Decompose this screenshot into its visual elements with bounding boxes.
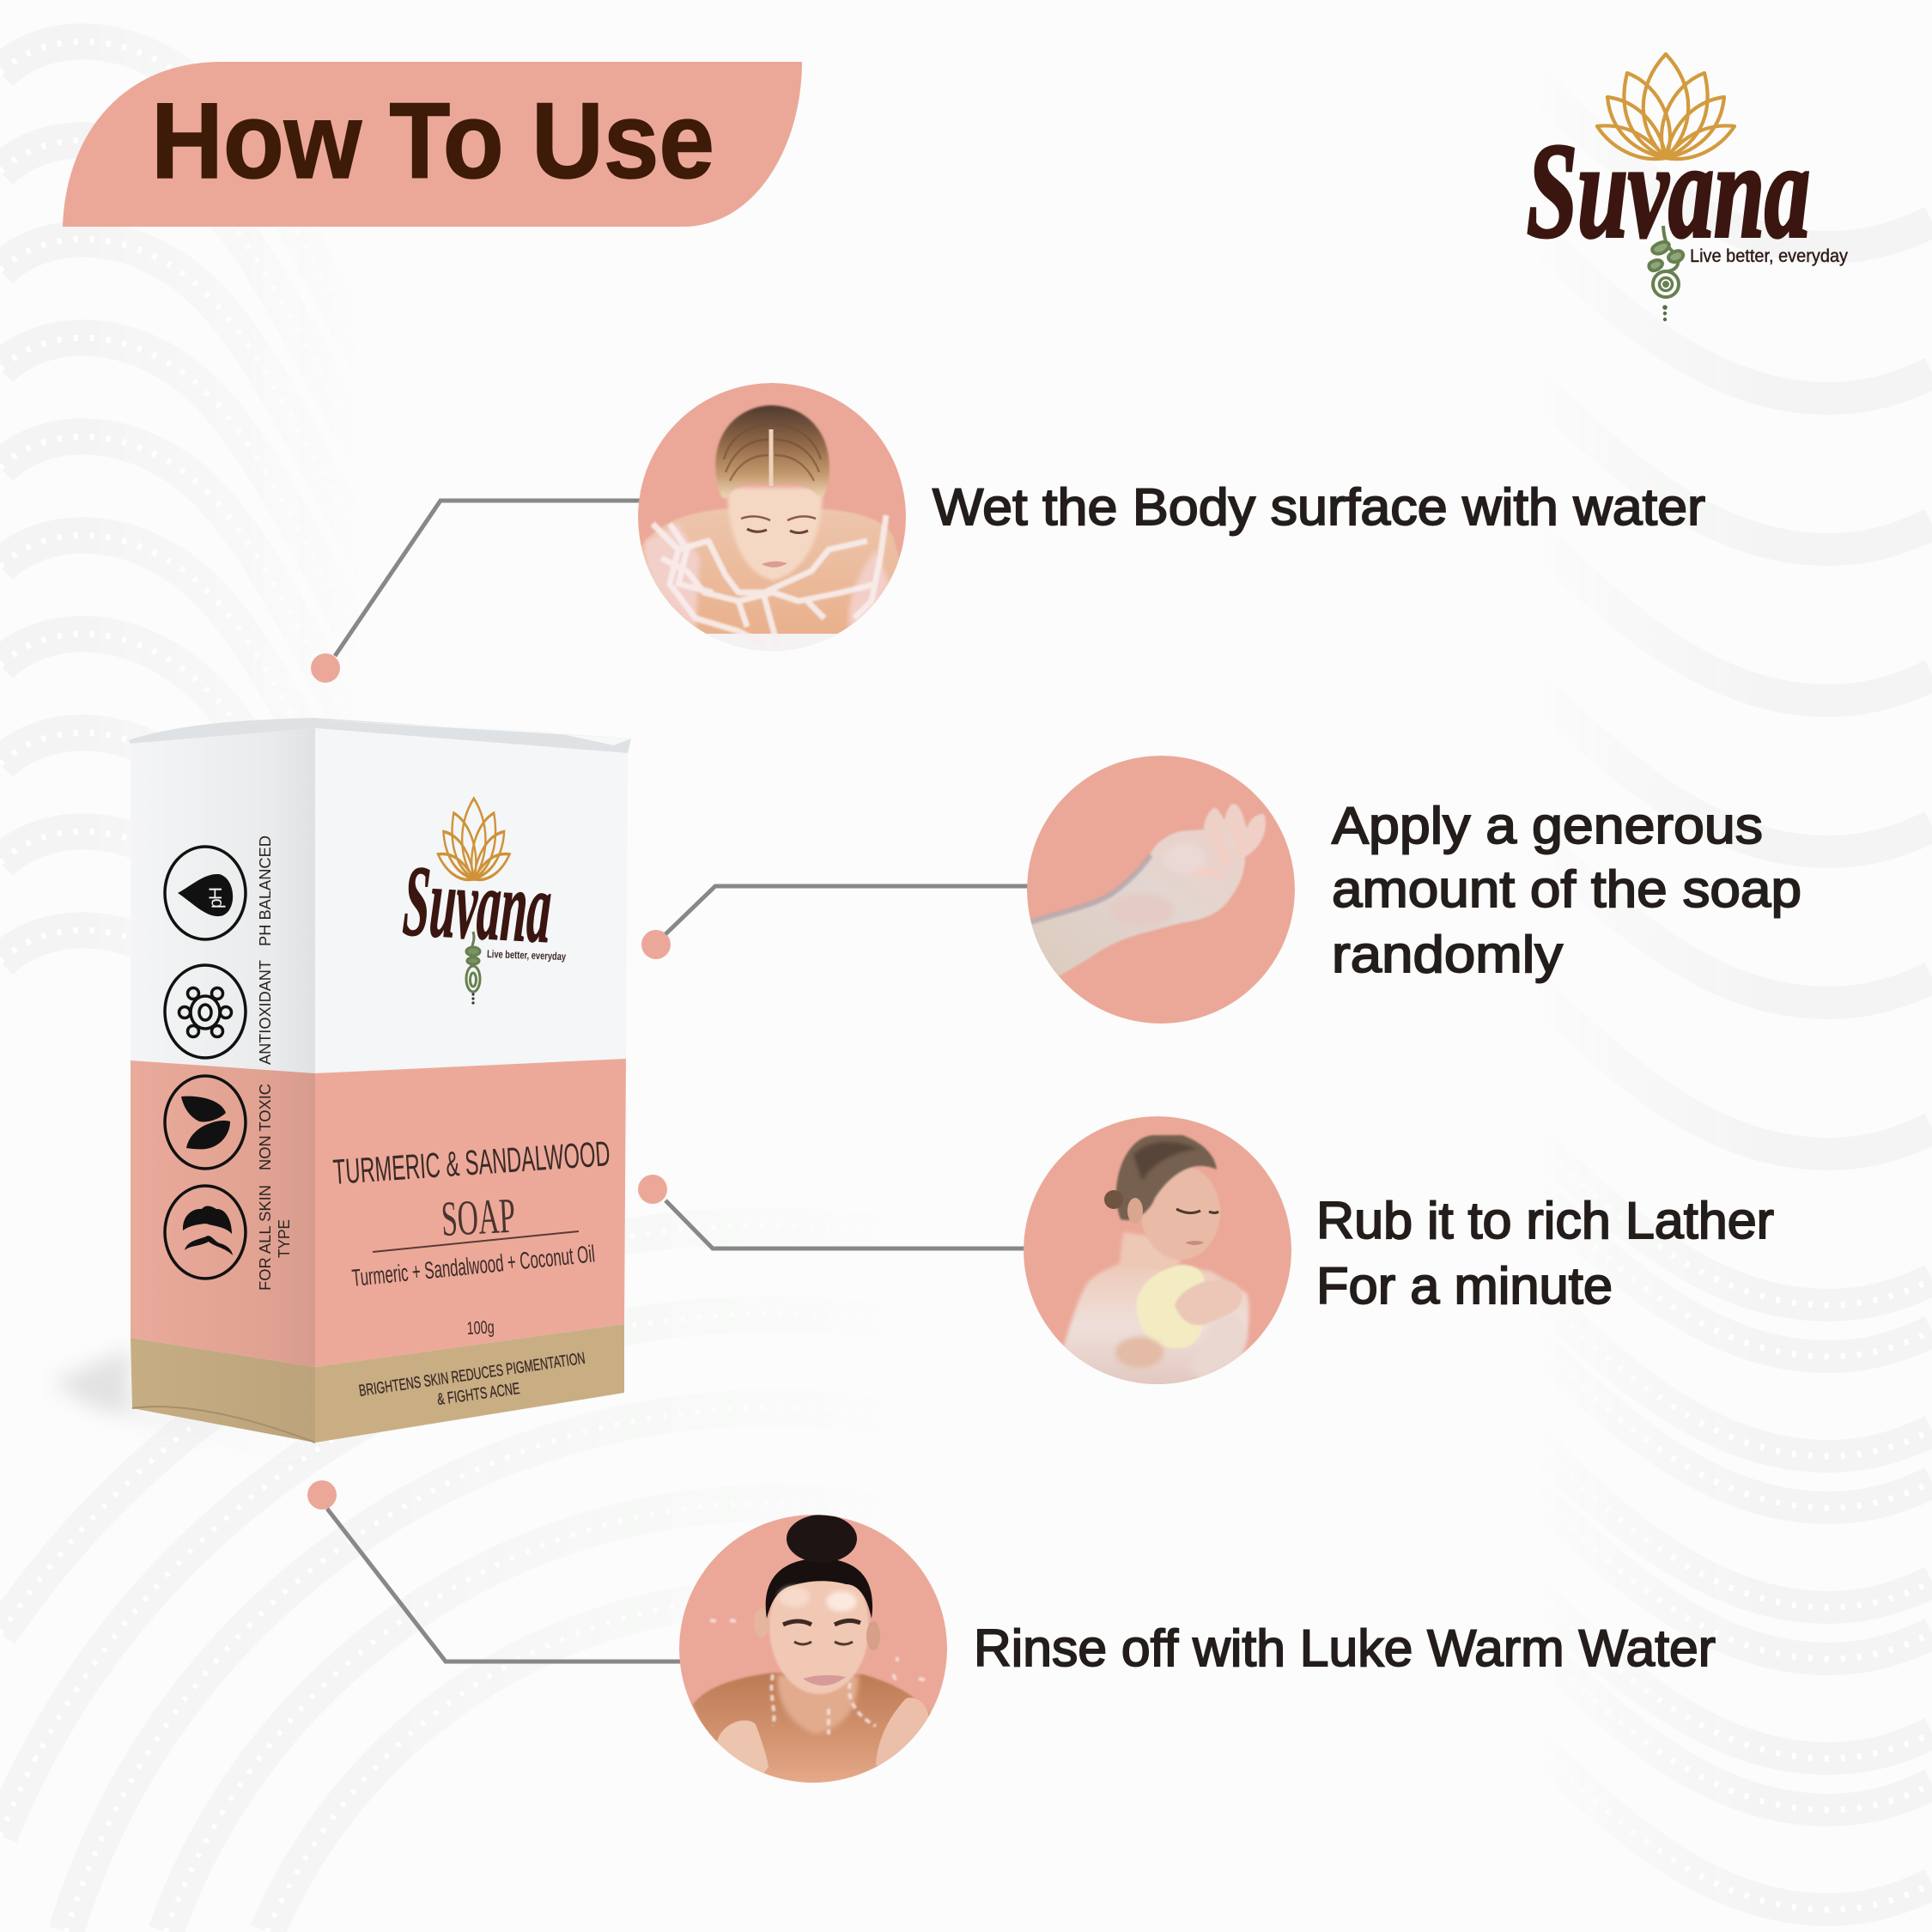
connector: step 2 [641, 886, 1028, 959]
icon: pH drop: pH [206, 887, 226, 908]
benefits: BRIGHTENS SKIN REDUCES PIGMENTATION [358, 1350, 586, 1400]
icon: pH drop [165, 847, 246, 939]
soap label: SOAP [440, 1188, 517, 1247]
side face [131, 728, 315, 1073]
water drops [710, 1620, 927, 1735]
water splash [645, 524, 893, 631]
dots [1662, 305, 1668, 321]
head [1104, 1135, 1220, 1260]
shoulders [693, 1673, 932, 1790]
step 4 text: Rinse off with Luke Warm Water [974, 1619, 1716, 1677]
step 2 text: amount of the soap [1332, 860, 1801, 918]
foam edge [1030, 855, 1151, 922]
brand logo [1527, 54, 1848, 321]
icon: skin layers [165, 1186, 246, 1279]
left hand [717, 1721, 769, 1777]
step 1 text: Wet the Body surface with water [933, 478, 1705, 536]
side claims: PH BALANCED [257, 835, 274, 946]
connector: step 1 [311, 501, 641, 683]
step 2 photo [1027, 756, 1295, 1024]
step 4 photo [679, 1515, 947, 1790]
fingers [1194, 854, 1229, 878]
step 2 text: Apply a generous [1332, 797, 1763, 854]
icon: lotus [1597, 54, 1735, 159]
back and arm [1063, 1261, 1249, 1391]
hand [1175, 1280, 1242, 1325]
head [754, 1515, 880, 1694]
top flap [129, 718, 631, 754]
icon: leaves [165, 1076, 246, 1169]
title text: How To Use [151, 82, 714, 201]
soap box: TYPE [276, 1219, 293, 1258]
head [715, 405, 829, 580]
connector: step 4 [307, 1480, 680, 1662]
weight: 100g [466, 1317, 495, 1339]
front face [315, 728, 628, 1073]
bottom fold [132, 1406, 315, 1443]
step 2 text [1332, 797, 1801, 983]
step 2 text: randomly [1332, 926, 1563, 983]
basin [707, 634, 837, 651]
box logo [401, 799, 566, 1005]
loofah [1136, 1265, 1205, 1348]
product name: TURMERIC & SANDALWOOD [331, 1133, 611, 1192]
right hand [876, 1698, 929, 1771]
shoulders [640, 508, 902, 637]
soap box: FOR ALL SKIN [257, 1185, 274, 1291]
step 3 text [1316, 1192, 1774, 1315]
step 1 photo [638, 383, 906, 661]
soap box: & FIGHTS ACNE [436, 1380, 521, 1409]
soap box: ANTIOXIDANT [257, 960, 274, 1065]
icon: unalome [1649, 226, 1683, 297]
step 3 photo [1024, 1116, 1291, 1391]
step 3 text: Rub it to rich Lather [1316, 1192, 1774, 1249]
tagline: Live better, everyday [1690, 246, 1848, 266]
box logo: Suvana [401, 844, 554, 964]
forearm and hand [1029, 804, 1266, 976]
connector: step 3 [638, 1175, 1024, 1249]
neck [1118, 1231, 1182, 1266]
title banner [63, 62, 802, 227]
neck [777, 1674, 859, 1735]
icon: antioxidant [165, 965, 246, 1058]
soap box: NON TOXIC [257, 1084, 274, 1170]
soap box [52, 718, 631, 1451]
step 3 text: For a minute [1316, 1257, 1613, 1315]
box shadow [52, 1348, 309, 1451]
ingredients: Turmeric + Sandalwood + Coconut Oil [350, 1240, 596, 1291]
box logo: Live better, everyday [487, 948, 566, 963]
